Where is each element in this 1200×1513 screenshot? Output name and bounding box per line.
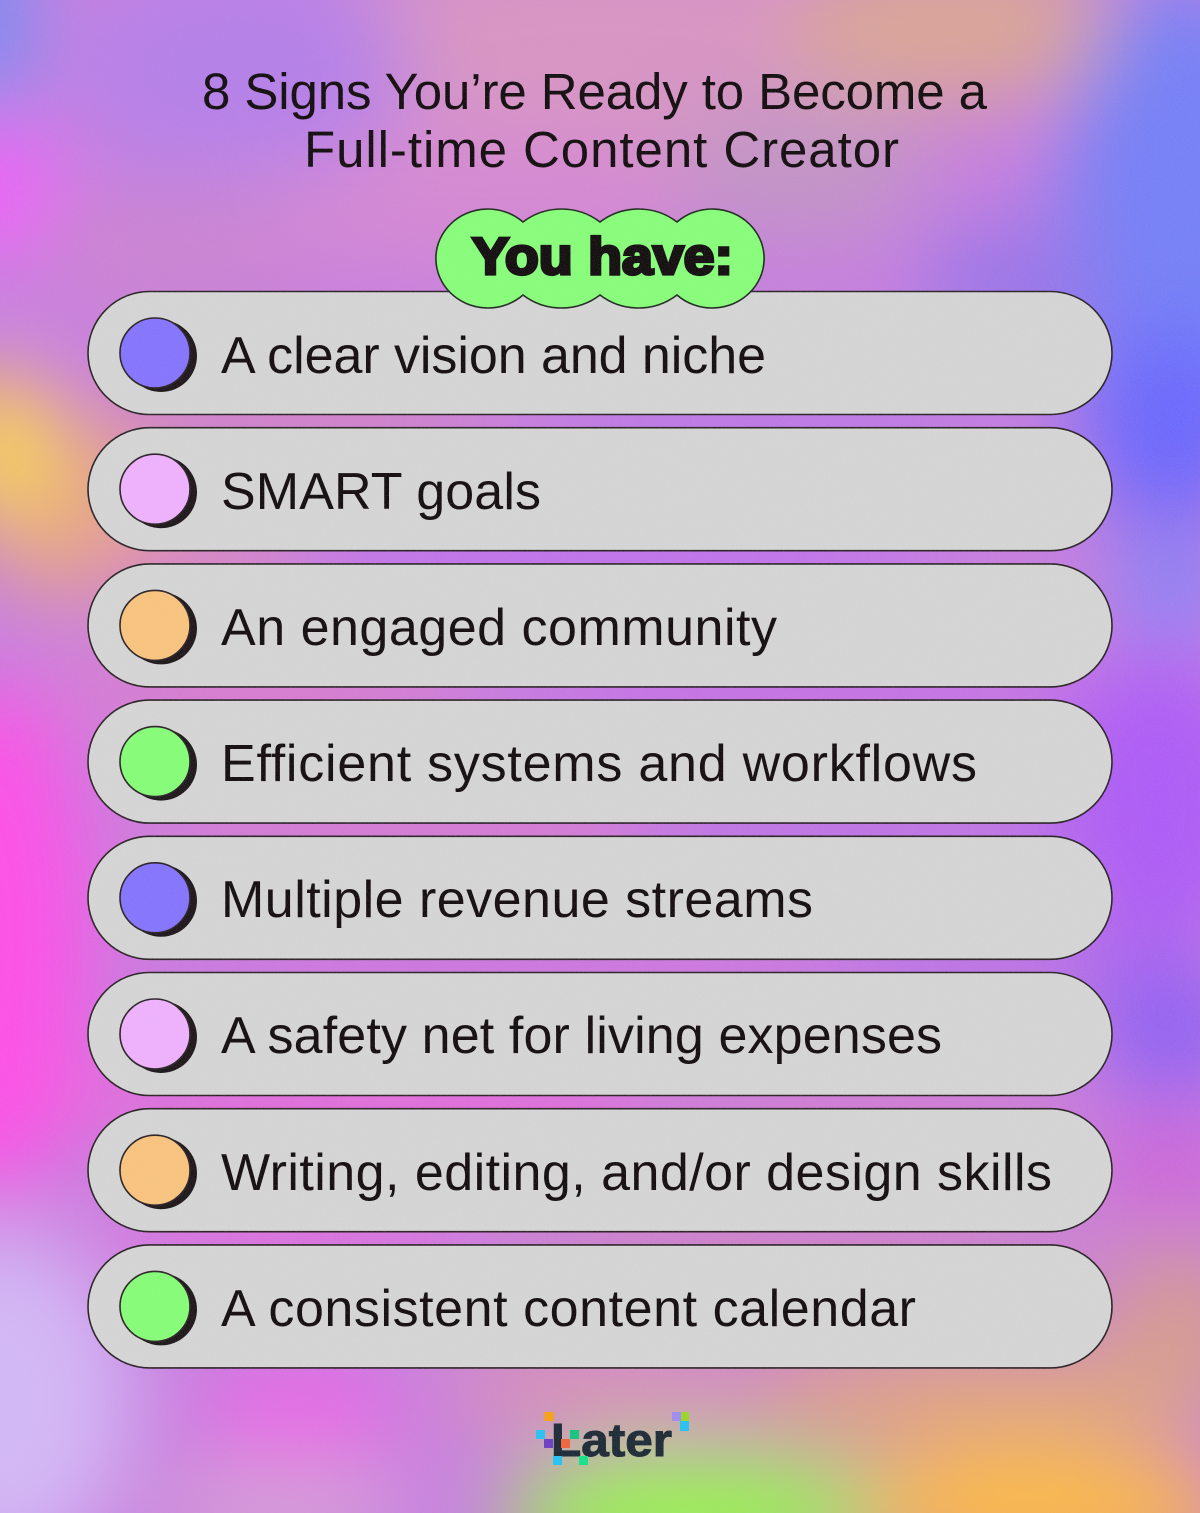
item 4: Efficient systems and workflows: Efficient systems and workflows <box>221 735 977 793</box>
item 4: Efficient systems and workflows <box>88 700 1112 823</box>
item 5: Multiple revenue streams: Multiple revenue streams <box>221 871 813 929</box>
title: 8 Signs You’re Ready to Become a <box>202 63 988 120</box>
item 1: A clear vision and niche <box>88 292 1112 414</box>
badge: You have: You have: <box>472 228 733 286</box>
item 8: A consistent content calendar: A consistent content calendar <box>221 1280 916 1338</box>
item 6: A safety net for living expenses: A safety net for living expenses <box>221 1007 942 1065</box>
item 6: A safety net for living expenses <box>88 972 1112 1096</box>
item 1: A clear vision and niche: A clear vision and niche <box>221 327 766 385</box>
item 7: Writing, editing, and/or design skills: Writing, editing, and/or design skills <box>221 1144 1052 1202</box>
badge: You have <box>436 209 764 308</box>
title: Full-time Content Creator <box>304 121 899 178</box>
title <box>202 63 988 178</box>
item 2: SMART goals <box>88 428 1112 551</box>
item 3: An engaged community: An engaged community <box>221 599 777 657</box>
item 8: A consistent content calendar <box>88 1245 1112 1368</box>
item 7: Writing, editing, and/or design skills <box>88 1109 1112 1232</box>
logo: Later: Later <box>551 1414 672 1466</box>
item 5: Multiple revenue streams <box>88 836 1112 959</box>
item 2: SMART goals: SMART goals <box>221 463 541 521</box>
item 3: An engaged community <box>88 564 1112 687</box>
